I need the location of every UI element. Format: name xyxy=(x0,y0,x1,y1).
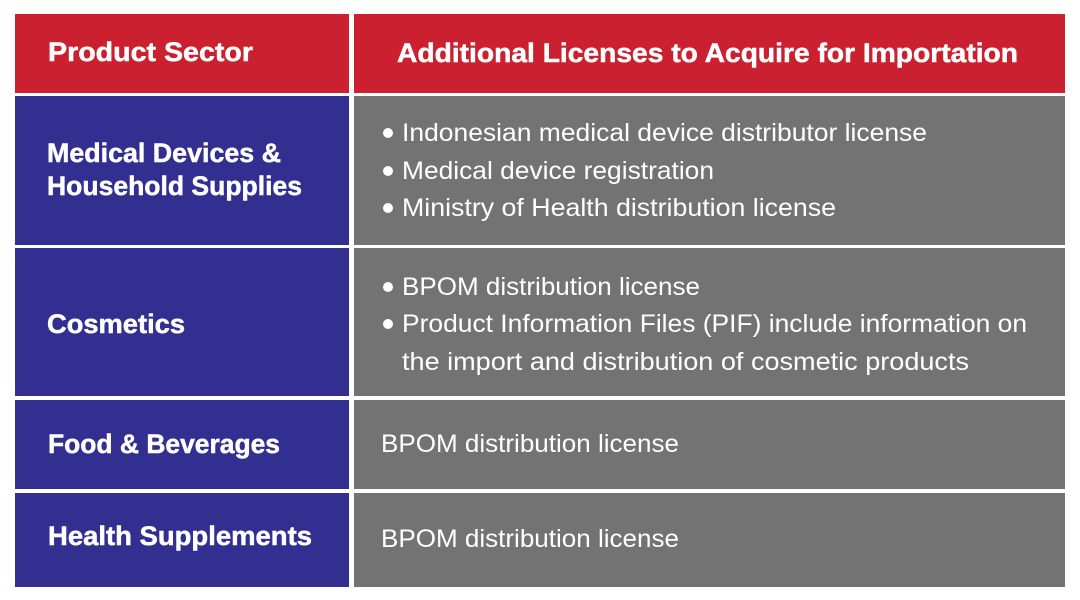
sector cell: cosmetics: Cosmetics xyxy=(47,309,185,339)
sector cell: cosmetics xyxy=(15,248,349,396)
sector cell: food and beverages: Food & Beverages xyxy=(48,429,280,459)
header cell: product sector xyxy=(15,14,349,93)
license cell: cosmetics: Product Information Files (PIF) include information on xyxy=(402,310,1027,338)
header cell: product sector: Product Sector xyxy=(48,37,254,67)
sector cell: health supplements: Health Supplements xyxy=(48,521,312,551)
license cell: medical devices: Ministry of Health distribution license xyxy=(402,194,836,222)
row: cosmetics xyxy=(15,248,1065,396)
license cell: food and beverages xyxy=(354,400,1065,489)
license cell: food and beverages: BPOM distribution license xyxy=(381,430,679,458)
sector cell: food and beverages xyxy=(15,400,349,489)
license cell: medical devices xyxy=(354,96,1065,245)
license cell: health supplements: BPOM distribution license xyxy=(381,525,679,553)
row: food and beverages xyxy=(15,400,1065,489)
sector cell: medical devices xyxy=(15,96,349,245)
sector cell: medical devices: Household Supplies xyxy=(47,171,302,201)
license cell: medical devices: Indonesian medical device distributor license xyxy=(402,119,927,147)
sector cell: health supplements xyxy=(15,493,349,587)
row: medical devices and household supplies xyxy=(15,96,1065,245)
header cell: additional licenses xyxy=(354,14,1065,93)
license cell: cosmetics: the import and distribution of cosmetic products xyxy=(402,348,969,376)
license cell: cosmetics: BPOM distribution license xyxy=(402,273,700,301)
license cell: cosmetics xyxy=(354,248,1065,396)
license cell: health supplements xyxy=(354,493,1065,587)
header cell: additional licenses: Additional Licenses to Acquire for Importation xyxy=(397,38,1018,68)
license cell: medical devices: Medical device registration xyxy=(402,157,714,185)
header row xyxy=(15,14,1065,93)
sector cell: medical devices: Medical Devices & xyxy=(47,138,281,168)
row: health supplements xyxy=(15,493,1065,587)
